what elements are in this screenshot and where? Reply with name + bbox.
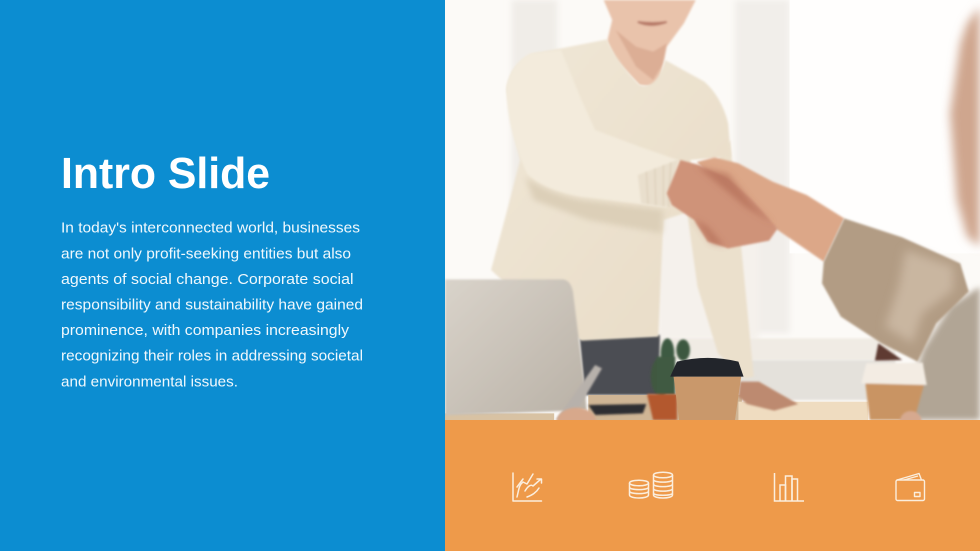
plant pot xyxy=(647,394,677,420)
coffee cup: white lid xyxy=(861,363,927,420)
text content xyxy=(61,149,363,390)
woman's body xyxy=(902,287,980,420)
sweater shadow under sleeve xyxy=(525,177,663,233)
man's head and neck xyxy=(604,0,696,87)
icon row xyxy=(512,472,926,502)
table items xyxy=(588,404,646,415)
icon: line chart with arrow xyxy=(513,473,542,501)
woman's sleeve xyxy=(822,218,969,362)
body paragraph: prominence, with companies increasingly xyxy=(61,322,350,339)
man's far arm xyxy=(687,140,754,378)
title: Intro Slide xyxy=(61,149,270,198)
woman's arm xyxy=(697,157,844,262)
sleeve highlight xyxy=(885,250,953,343)
body paragraph: recognizing their roles in addressing societal xyxy=(61,348,363,365)
body paragraph: In today's interconnected world, businesses xyxy=(61,220,360,237)
pen xyxy=(556,365,602,420)
cactus xyxy=(651,338,690,397)
hand shadows xyxy=(694,167,773,247)
foreground hand right xyxy=(900,411,922,432)
body paragraph: agents of social change. Corporate social xyxy=(61,271,353,288)
body paragraph: and environmental issues. xyxy=(61,373,238,390)
man's outstretched sleeve xyxy=(506,50,680,207)
icon: bar chart xyxy=(774,473,804,501)
man's sweater xyxy=(491,39,731,341)
woman's hidden hand xyxy=(875,343,902,361)
table xyxy=(445,395,868,420)
body paragraph: responsibility and sustainability have gained xyxy=(61,296,363,314)
room background xyxy=(445,0,980,420)
body paragraph xyxy=(61,220,363,390)
panel: blue text panel xyxy=(0,0,445,551)
icon: wallet xyxy=(896,474,924,500)
body paragraph: are not only profit-seeking entities but also xyxy=(61,245,351,262)
man's hand on table xyxy=(738,382,798,411)
icon: coin stacks xyxy=(630,472,672,498)
woman's hair xyxy=(950,7,980,247)
man's trousers xyxy=(580,335,660,395)
panel: orange icon band xyxy=(445,420,980,551)
sleeve cuff xyxy=(638,159,679,207)
coffee cup: dark lid xyxy=(670,358,744,420)
foreground hand holding pen xyxy=(557,408,596,436)
panel: handshake photo illustration xyxy=(445,0,980,420)
clasped hands xyxy=(667,160,778,248)
laptop xyxy=(445,279,587,415)
